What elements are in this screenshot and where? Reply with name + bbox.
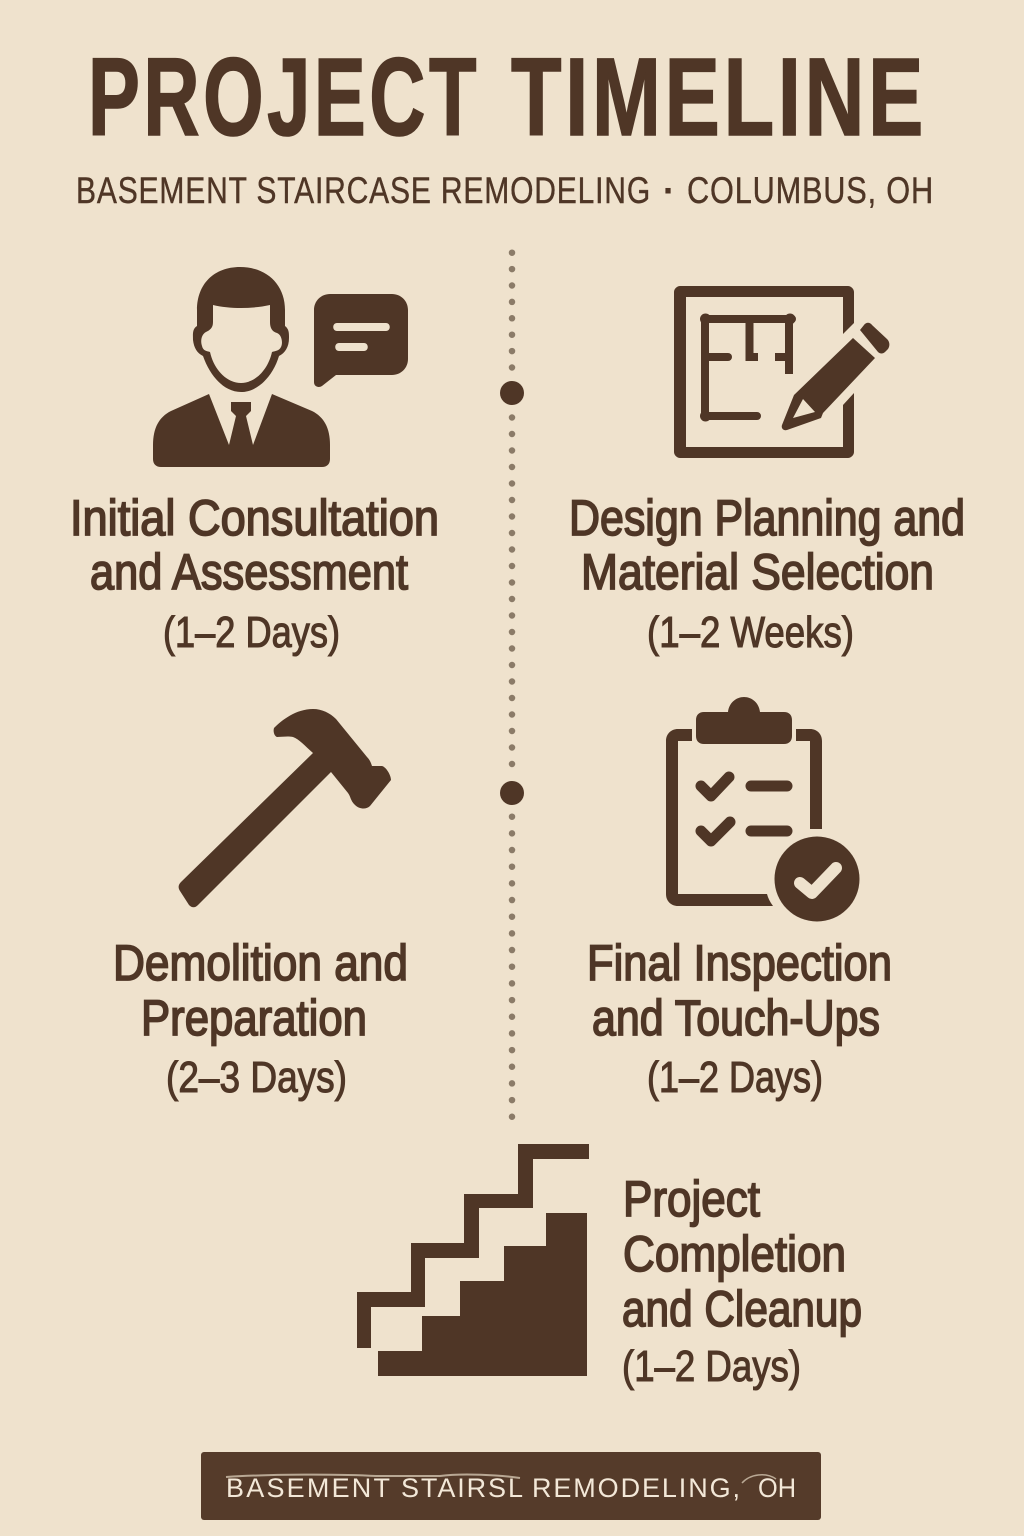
- subtitle: ·: [663, 170, 675, 211]
- heading: project completion: and Cleanup: [622, 1281, 862, 1337]
- icon: staircase: [357, 1144, 589, 1376]
- heading: project completion: Project: [623, 1171, 760, 1227]
- heading: final inspection: and Touch-Ups: [592, 990, 880, 1046]
- subtitle: COLUMBUS, OH: [687, 170, 934, 211]
- footer banner: STAIRSL: [401, 1473, 523, 1503]
- heading: design planning: Material Selection: [581, 544, 934, 600]
- heading: demolition: (2–3 Days): [166, 1053, 347, 1102]
- heading: initial consultation: (1–2 Days): [163, 608, 340, 657]
- icon: hammer: [179, 709, 391, 907]
- heading: project completion: [622, 1171, 862, 1391]
- heading: final inspection: (1–2 Days): [647, 1053, 823, 1102]
- heading: final inspection: Final Inspection: [587, 935, 892, 991]
- heading: demolition: [113, 935, 408, 1102]
- icon: consultant with speech bubble: [153, 267, 408, 467]
- subtitle: BASEMENT STAIRCASE REMODELING: [76, 170, 651, 211]
- footer banner: BASEMENT: [226, 1473, 390, 1503]
- icon: floor plan and pencil: [674, 286, 889, 458]
- title: [88, 36, 927, 159]
- heading: project completion: Completion: [623, 1226, 846, 1282]
- heading: design planning: (1–2 Weeks): [647, 608, 854, 657]
- icon: clipboard with check: [666, 697, 860, 922]
- footer banner: [201, 1452, 821, 1520]
- title: PROJECT: [88, 36, 480, 159]
- footer banner: OH: [758, 1473, 796, 1503]
- heading: final inspection: [587, 935, 892, 1102]
- heading: demolition: Demolition and: [113, 935, 408, 991]
- heading: design planning: Design Planning and: [569, 490, 965, 546]
- heading: project completion: (1–2 Days): [622, 1342, 801, 1391]
- heading: initial consultation: and Assessment: [90, 544, 408, 600]
- heading: design planning: [569, 490, 965, 657]
- heading: demolition: Preparation: [141, 990, 367, 1046]
- heading: initial consultation: [70, 490, 439, 657]
- heading: initial consultation: Initial Consultation: [70, 490, 439, 546]
- dotted timeline: [500, 253, 524, 1118]
- footer banner: REMODELING,: [532, 1473, 740, 1503]
